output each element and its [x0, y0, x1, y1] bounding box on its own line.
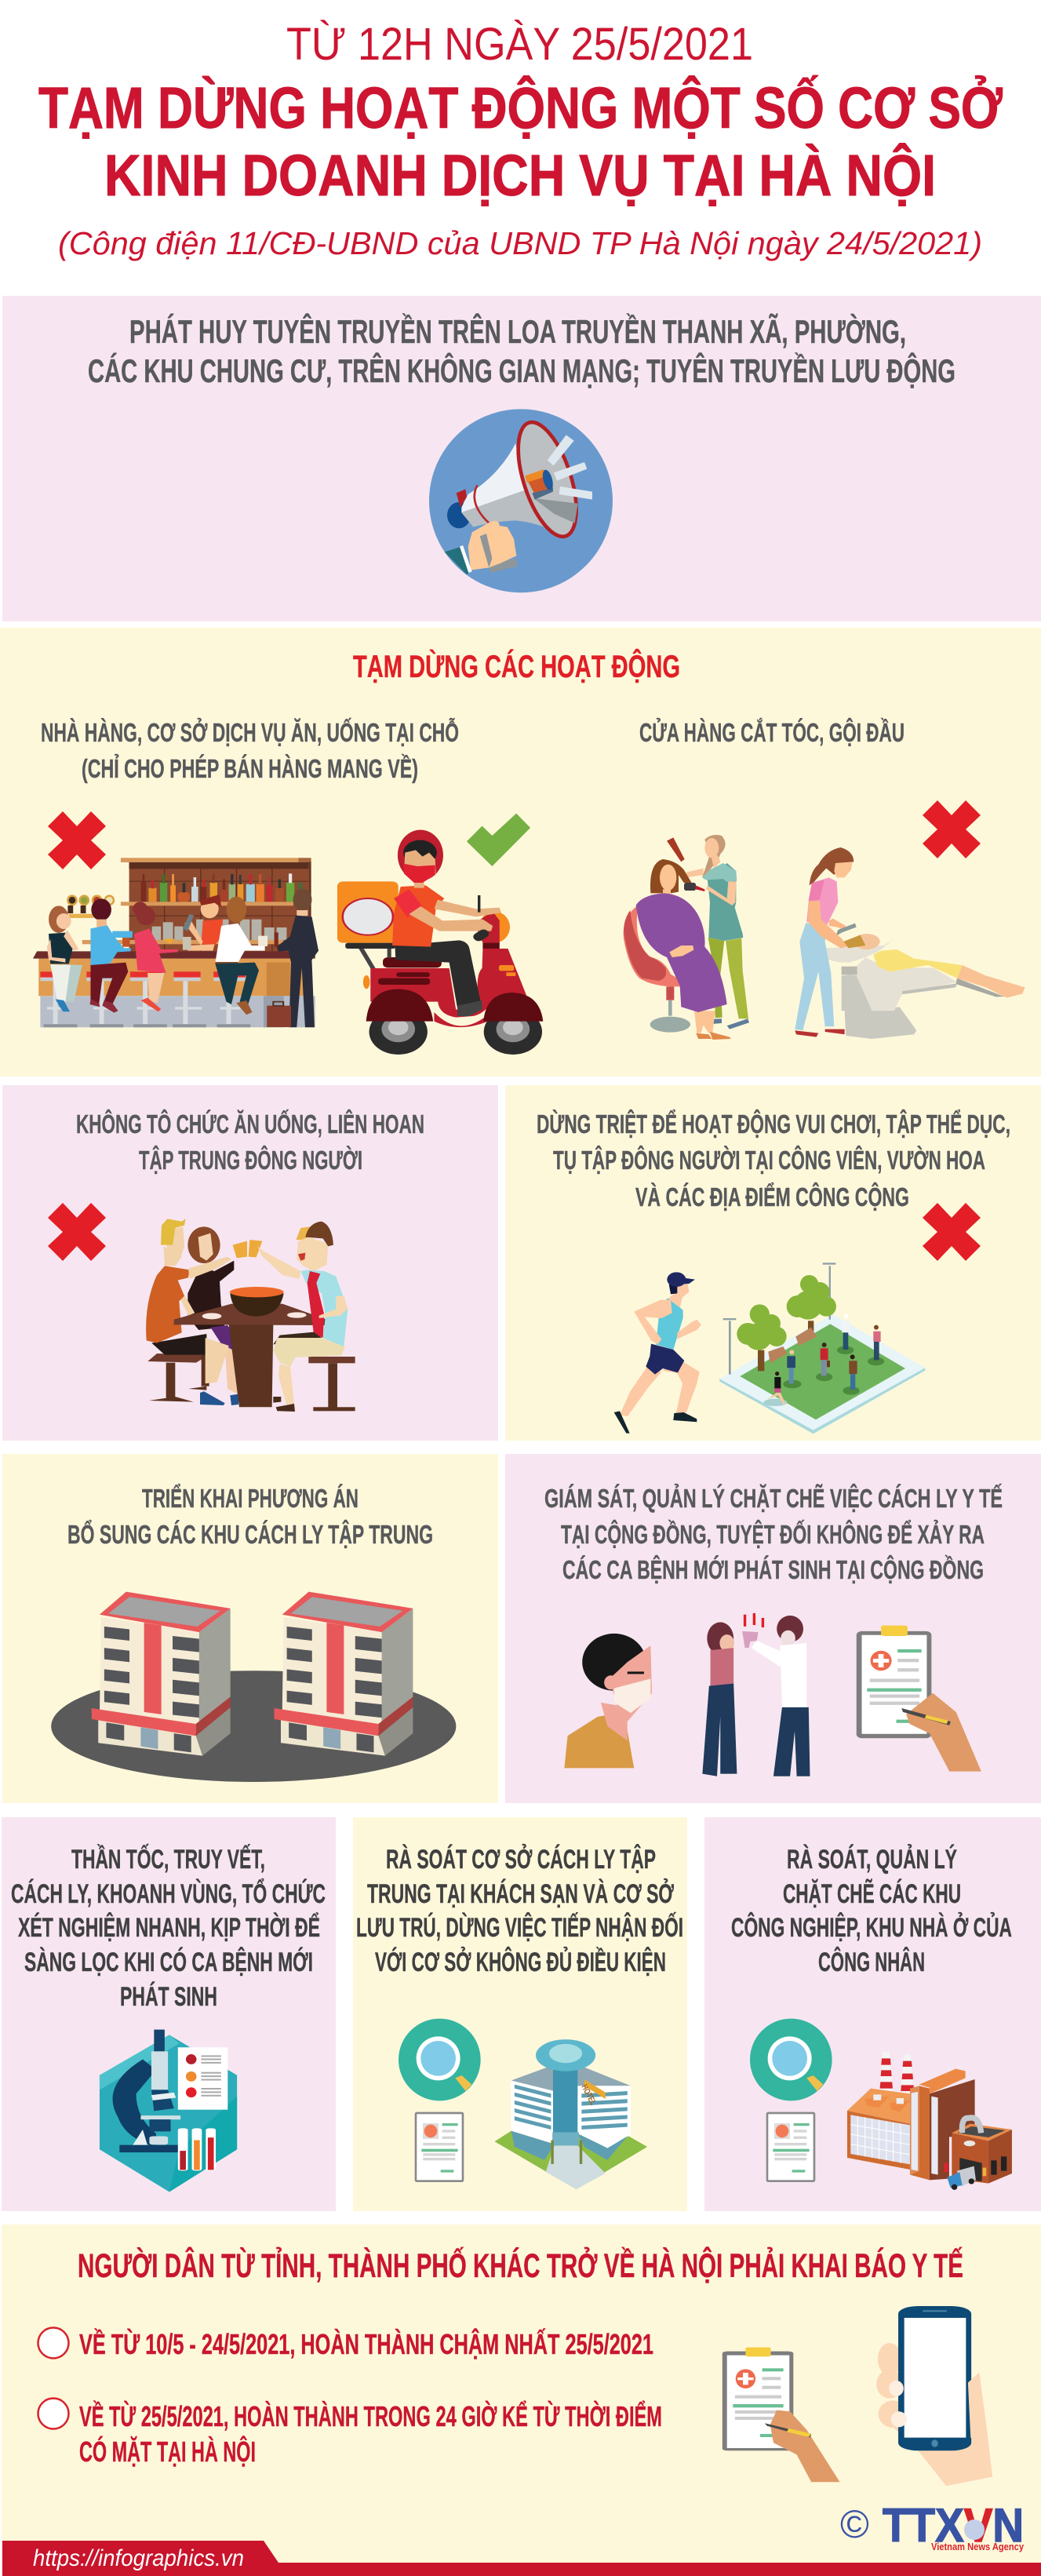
illustration: microscope [100, 2030, 237, 2192]
man right [257, 1222, 348, 1412]
shampoo stylist [795, 847, 857, 1037]
text: bullet 2: VỀ TỪ 25/5/2021, HOÀN THÀNH TRONG 24 GIỜ KỂ TỪ THỜI ĐIỂM [79, 2399, 662, 2432]
person: man in blue [90, 898, 133, 1013]
illustration: friends at table [146, 1219, 355, 1412]
illustration: phone in hand [876, 2306, 992, 2486]
icon: megaphone [429, 409, 613, 592]
icon: document [415, 2112, 464, 2182]
title block: KINH DOANH DỊCH VỤ TẠI HÀ NỘI [104, 143, 936, 208]
text: contact tracing: THẦN TỐC, TRUY VẾT, [71, 1844, 265, 1875]
bullet 2 [38, 2398, 69, 2429]
bottles [141, 873, 303, 902]
stools [40, 971, 250, 1027]
icon: red cross public [923, 1203, 981, 1261]
panel: hotel review [353, 1817, 687, 2211]
person: man in white [215, 897, 265, 1015]
panel: medical isolation [505, 1454, 1041, 1803]
text: bullet 2: CÓ MẶT TẠI HÀ NỘI [79, 2435, 256, 2468]
drinks [122, 932, 278, 950]
footer bar [2, 2541, 1041, 2576]
icon: green check [467, 814, 530, 866]
panel: no gatherings [2, 1085, 498, 1441]
delivery box [337, 881, 399, 943]
text: bullet 1: VỀ TỪ 10/5 - 24/5/2021, HOÀN THÀNH CHẬM NHẤT 25/5/2021 [79, 2327, 653, 2360]
text: stop public activities [537, 1109, 1010, 1211]
park visitors [763, 1314, 884, 1406]
text: hotel review [356, 1845, 683, 1977]
logo: TTXVN: TTXVN [883, 2499, 1024, 2552]
text: hotel review: RÀ SOÁT CƠ SỞ CÁCH LY TẬP [386, 1845, 656, 1875]
bullet 1 [38, 2327, 69, 2359]
text: contact tracing: CÁCH LY, KHOANH VÙNG, TỔ CHỨC [11, 1879, 326, 1909]
footer url: https://infographics.vn [33, 2545, 244, 2571]
illustration: delivery scooter [337, 830, 543, 1055]
icon: magnifier [750, 2019, 832, 2101]
illustration: temperature check [702, 1613, 810, 1776]
text: bullet 2 [79, 2399, 662, 2468]
panel: suspended activities [0, 628, 1041, 1077]
text: no gatherings: TẬP TRUNG ĐÔNG NGƯỜI [139, 1145, 362, 1175]
beer taps [67, 894, 115, 918]
illustration: factory [847, 2052, 1012, 2190]
man left [146, 1219, 231, 1383]
icon: red cross restaurants [48, 811, 106, 869]
title block: (Công điện 11/CĐ-UBND của UBND TP Hà Nội ngày 24/5/2021) [58, 225, 982, 261]
text: contact tracing: XÉT NGHIỆM NHANH, KỊP THỜI ĐỂ [18, 1913, 320, 1943]
icon: document [766, 2112, 815, 2182]
text: hotel review: TRUNG TẠI KHÁCH SẠN VÀ CƠ SỞ [367, 1879, 674, 1909]
person: woman in pink [133, 902, 178, 1011]
illustration: clipboard and hand [723, 2348, 840, 2482]
text: no gatherings [76, 1109, 424, 1175]
text: industrial zones [731, 1845, 1012, 1977]
bag [267, 1002, 291, 1027]
propaganda text [88, 312, 955, 389]
panel: returnees [2, 2224, 1041, 2576]
stylist [686, 835, 749, 1029]
text: restaurants: NHÀ HÀNG, CƠ SỞ DỊCH VỤ ĂN, UỐNG TẠI CHỖ [41, 717, 459, 747]
building right [275, 1592, 413, 1756]
panel: industrial zones [704, 1817, 1041, 2211]
illustration: clipboard and hand [857, 1626, 981, 1772]
icon: red cross hair salon [923, 800, 981, 858]
text: hotel review: LƯU TRÚ, DỪNG VIỆC TIẾP NHẬN ĐỐI [356, 1912, 683, 1943]
person: woman at bar [47, 905, 82, 1011]
illustration: masked man [564, 1634, 652, 1768]
text: restaurants: (CHỈ CHO PHÉP BÁN HÀNG MANG VỀ) [82, 754, 418, 783]
panel: quarantine areas [2, 1454, 498, 1803]
icon: magnifier [399, 2019, 481, 2101]
panel: contact tracing [2, 1817, 336, 2211]
illustration: hotel [494, 2039, 647, 2189]
text: quarantine areas: TRIỂN KHAI PHƯƠNG ÁN [142, 1484, 359, 1513]
text: hotel review: VỚI CƠ SỞ KHÔNG ĐỦ ĐIỀU KIỆN [375, 1947, 666, 1977]
illustration: park [719, 1262, 925, 1434]
logo: TTXVN: © [840, 2502, 869, 2546]
text: stop public activities: VÀ CÁC ĐỊA ĐIỂM CÔNG CỘNG [635, 1182, 909, 1211]
text: no gatherings: KHÔNG TÔ CHỨC ĂN UỐNG, LIÊN HOAN [76, 1109, 424, 1139]
icon: red cross gatherings [48, 1203, 106, 1261]
person: man in suit [277, 889, 318, 1027]
illustration: bar [33, 858, 318, 1027]
text: contact tracing: PHÁT SINH [120, 1982, 217, 2012]
text: quarantine areas: BỔ SUNG CÁC KHU CÁCH LY TẬP TRUNG [67, 1520, 433, 1549]
logo: TTXVN: Vietnam News Agency [931, 2541, 1025, 2552]
illustration: two buildings [51, 1592, 456, 1782]
title block: TỪ 12H NGÀY 25/5/2021 [286, 19, 753, 70]
heading: suspended activities: TẠM DỪNG CÁC HOẠT ĐỘNG [353, 648, 680, 684]
text: contact tracing: SÀNG LỌC KHI CÓ CA BỆNH MỚI [24, 1947, 313, 1977]
illustration: haircut [624, 835, 749, 1040]
text: restaurants [41, 717, 459, 783]
title block [38, 19, 1003, 261]
hotel sign: HOTEL [579, 2083, 598, 2107]
text: contact tracing [11, 1844, 326, 2012]
building left [92, 1592, 231, 1756]
illustration: shampoo [795, 847, 1025, 1039]
text: hair salons: CỬA HÀNG CẮT TÓC, GỘI ĐẦU [639, 717, 905, 747]
seated customer [636, 859, 731, 1040]
illustration: runner [614, 1272, 701, 1434]
rider head [398, 830, 443, 888]
panel: stop public activities [505, 1085, 1041, 1441]
text: industrial zones: RÀ SOÁT, QUẢN LÝ [787, 1845, 957, 1875]
text: medical isolation [544, 1484, 1003, 1584]
person: bartender [183, 894, 223, 951]
text: industrial zones: CÔNG NHÂN [818, 1947, 925, 1977]
text: quarantine areas [67, 1484, 433, 1549]
woman [187, 1226, 239, 1405]
panel: propaganda [2, 296, 1041, 621]
glasses [152, 920, 286, 940]
